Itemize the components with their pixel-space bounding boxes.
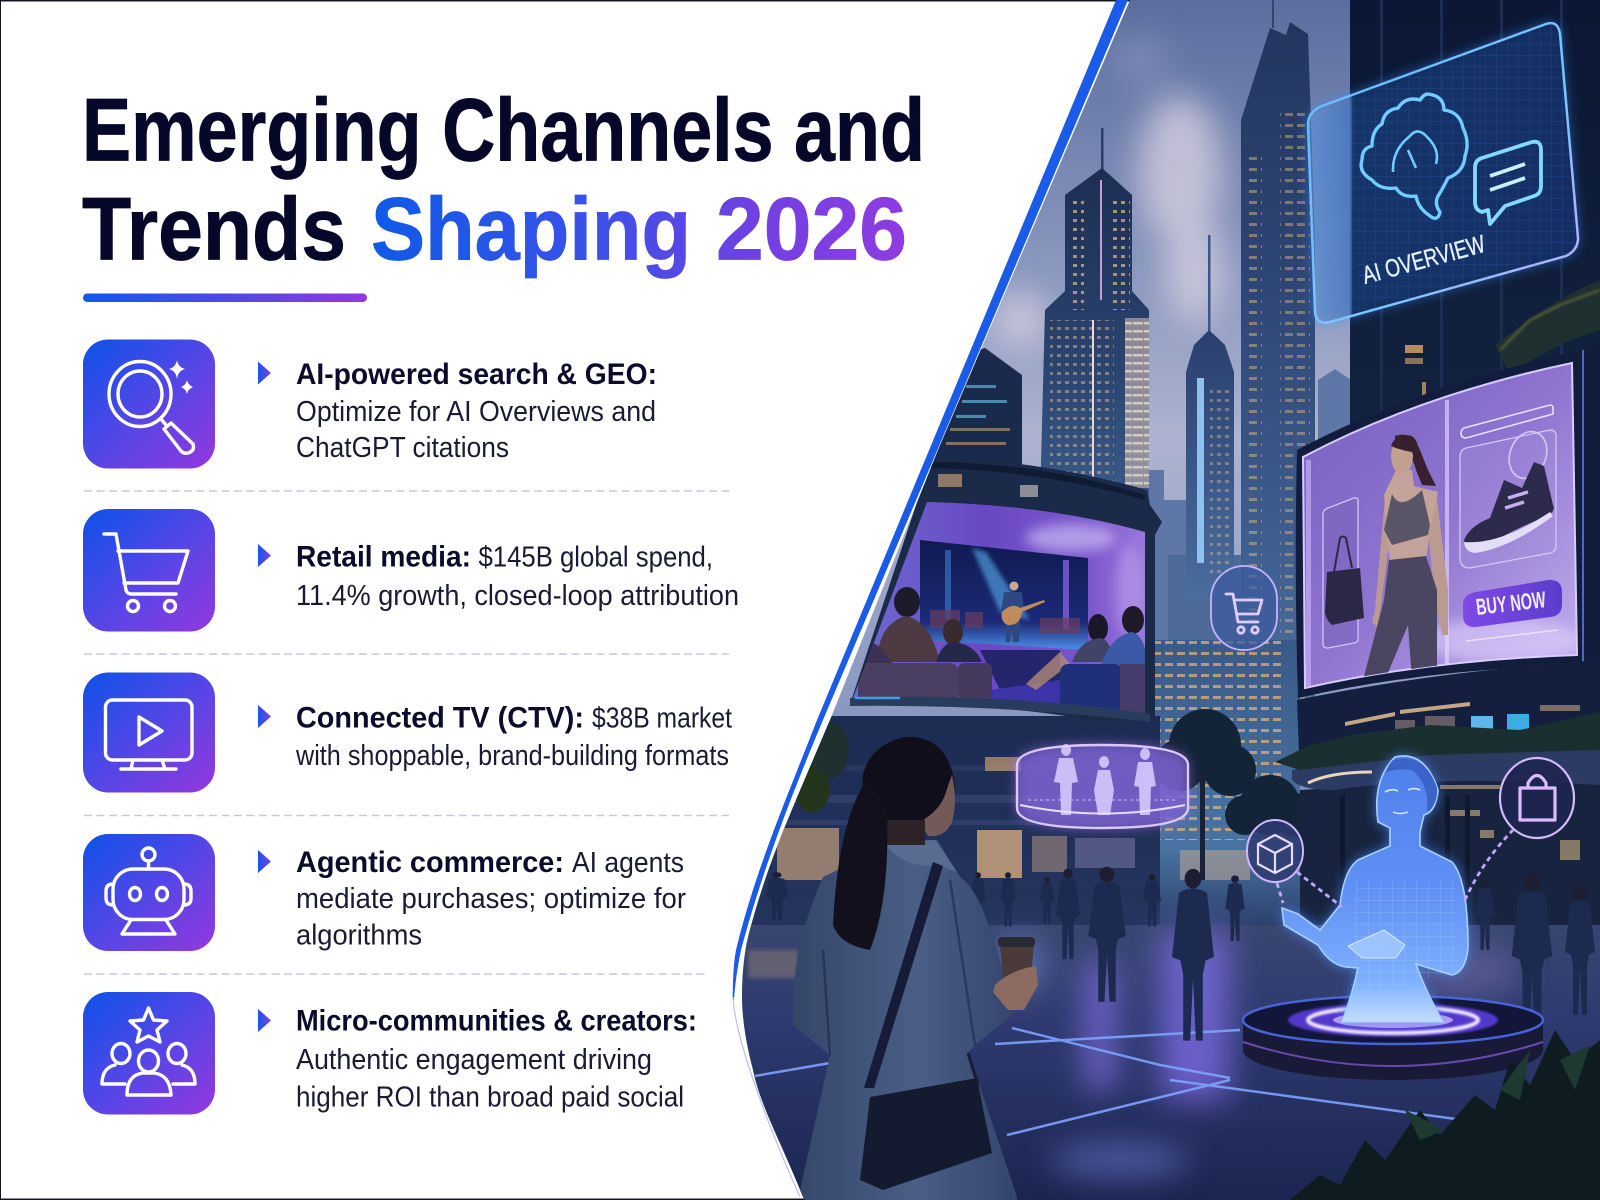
- sports top: [1384, 490, 1430, 545]
- title: 2026: [716, 178, 907, 278]
- tower: left centre skyscraper: [1040, 128, 1149, 500]
- text: agentic commerce: [296, 846, 686, 952]
- button: buy now: BUY NOW: [1475, 586, 1547, 620]
- icon: brain: [1361, 94, 1467, 218]
- foreground woman: [793, 737, 1038, 1200]
- icon: television with play button: [83, 672, 215, 792]
- list row: AI-powered search: [83, 340, 657, 468]
- title: Trends: [82, 178, 346, 278]
- coat: [793, 840, 1017, 1200]
- coffee cup: [993, 937, 1038, 1010]
- sofas: [866, 643, 892, 663]
- crowd: [766, 867, 1595, 1041]
- bullet arrow: [258, 362, 271, 384]
- handbag: [860, 1078, 992, 1190]
- text: micro-communities: [296, 1004, 697, 1114]
- billboard: connected TV screen: [850, 457, 1162, 722]
- hologram woman on pedestal: [1243, 756, 1543, 1080]
- icon: robot: [83, 834, 215, 951]
- lower centre lit building: [1150, 640, 1300, 935]
- arms: [1372, 490, 1448, 635]
- text: connected TV: [295, 702, 732, 772]
- distant towers: [1149, 369, 1350, 640]
- icon: community with star: [83, 992, 215, 1114]
- tower: slim spire: [1186, 235, 1234, 600]
- tower: tallest central: [1241, 0, 1315, 700]
- dashed connectors: [1277, 830, 1513, 907]
- text: connected TV: Connected TV (CTV):: [296, 702, 584, 734]
- leggings: [1363, 556, 1437, 680]
- text: AI OVERVIEW: AI OVERVIEW: [1359, 230, 1489, 290]
- left building: [920, 348, 1022, 470]
- bullet arrow: [258, 705, 271, 728]
- sneaker: [1464, 462, 1554, 550]
- text: retail media: 11.4% growth, closed-loop attribution: [296, 580, 739, 612]
- text: AI-powered search: [296, 358, 657, 464]
- ad model: [1363, 435, 1448, 680]
- hologram figure glow: [1282, 756, 1468, 1022]
- bullet arrow: [258, 850, 271, 873]
- icon: speech bubble: [1475, 142, 1541, 224]
- list row: connected TV: [83, 672, 732, 792]
- hologram figure: [1282, 756, 1468, 1022]
- viewers: [877, 587, 1148, 690]
- text: connected TV: $38B market: [592, 702, 732, 734]
- text: retail media: $145B global spend,: [478, 542, 713, 574]
- sky: [796, 0, 1498, 800]
- ad card: sneaker: [1460, 405, 1556, 568]
- text: micro-communities: Authentic engagement driving: [296, 1044, 652, 1076]
- billboard: retail fashion ad: [1296, 345, 1600, 698]
- TV stand and floor: [980, 650, 1060, 690]
- title underline: [83, 294, 367, 302]
- text: micro-communities: Micro-communities & creators:: [296, 1004, 697, 1038]
- hair: [1395, 435, 1436, 486]
- text: retail media: Retail media:: [296, 540, 471, 574]
- icon bubble: box: [1247, 820, 1303, 882]
- icon bubble: shopping bag: [1500, 758, 1574, 838]
- blue diagonal divider: [732, 0, 1128, 1197]
- plaza floor: [720, 925, 1600, 1200]
- musician on screen: [1001, 582, 1045, 642]
- text: agentic commerce: Agentic commerce:: [296, 846, 564, 879]
- text: retail media: [296, 540, 739, 612]
- rotunda behind hologram: [1275, 712, 1600, 935]
- ponytail: [833, 778, 887, 950]
- text: AI-powered search: AI-powered search & GEO:: [296, 358, 657, 391]
- clouds: [992, 35, 1225, 348]
- button: buy now: [1463, 580, 1562, 627]
- hologram face and hair: [1386, 759, 1437, 812]
- title: Shaping: [371, 178, 691, 278]
- hologram: audience cylinder: [1017, 744, 1188, 828]
- row dividers: [84, 491, 729, 974]
- text: micro-communities: higher ROI than broad paid social: [296, 1082, 684, 1114]
- text: agentic commerce: algorithms: [296, 920, 422, 952]
- text: agentic commerce: mediate purchases; optimize for: [296, 883, 686, 915]
- title: [82, 80, 925, 278]
- panel: futuristic city scene: [720, 0, 1600, 1200]
- dark tower behind AI panel: [1350, 0, 1600, 460]
- text: AI-powered search: ChatGPT citations: [296, 432, 509, 464]
- torso skin: [1384, 470, 1438, 565]
- mid-ground buildings: [720, 716, 1250, 935]
- text: agentic commerce: AI agents: [572, 847, 684, 879]
- ad card: handbag: [1323, 498, 1364, 648]
- list row: retail media: [83, 509, 739, 632]
- icon bubble: cart: [1211, 566, 1277, 650]
- foreground foliage: [1290, 1030, 1600, 1200]
- text: AI-powered search: Optimize for AI Overviews and: [296, 396, 656, 428]
- icon: shopping cart: [83, 509, 215, 632]
- bullet arrow: [258, 544, 271, 567]
- pedestal: [1243, 996, 1543, 1080]
- list row: micro-communities: [83, 992, 697, 1114]
- head and hair: [863, 737, 955, 839]
- panel: AI overview hologram: [1308, 23, 1578, 323]
- title: Emerging Channels and: [82, 80, 925, 180]
- round building base under ad: [1297, 660, 1600, 750]
- list row: agentic commerce: [83, 834, 686, 952]
- shoulder strap: [864, 862, 943, 1088]
- bullet arrow: [258, 1009, 271, 1032]
- icon: magnifying glass: [83, 340, 215, 468]
- trees behind plaza: [794, 709, 1317, 880]
- text: connected TV: with shoppable, brand-building formats: [295, 740, 729, 772]
